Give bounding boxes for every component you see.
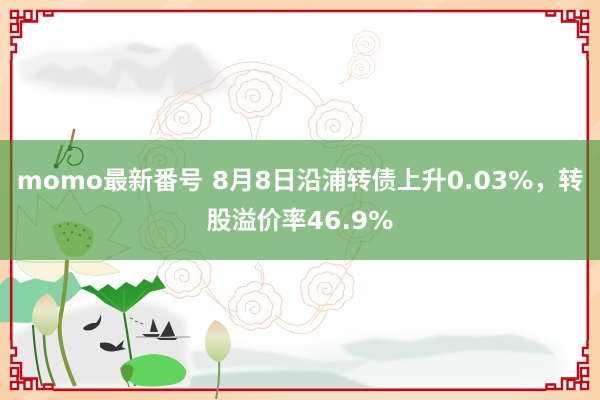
ink mountains top left: [16, 42, 235, 100]
large dark green lotus leaf: [80, 275, 166, 386]
right lotus bud: [205, 320, 231, 399]
ink fish: [83, 314, 126, 352]
pale green lotus leaf: [0, 272, 82, 323]
left lotus buds: [32, 293, 59, 386]
title: momo最新番号 8月8日沿浦转债上升0.03%，转: [17, 166, 583, 195]
lotus flower: [15, 190, 130, 282]
title: [17, 166, 583, 235]
mountains bottom right: [190, 334, 565, 388]
translucent green title band: [0, 140, 600, 260]
round bright green leaf: [121, 354, 186, 387]
ink sailing boats: [130, 318, 190, 340]
mist wash behind lotus: [14, 300, 190, 386]
lotus flower stem: [60, 260, 75, 386]
title: 股溢价率46.9%: [207, 206, 393, 235]
dragonfly: [54, 130, 83, 168]
auspicious cloud ring: [139, 31, 382, 334]
